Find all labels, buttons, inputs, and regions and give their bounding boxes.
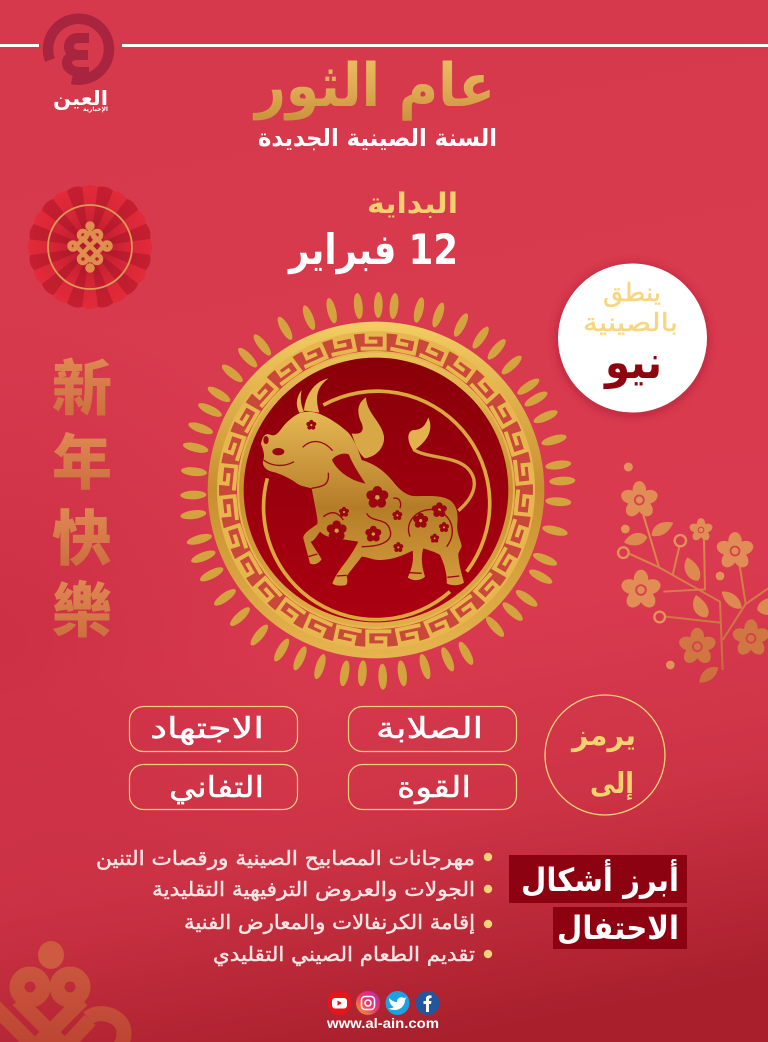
icon: instagram [356,991,380,1015]
pill: solidity [348,706,516,752]
symbolism label line 2: إلى [590,766,634,801]
ox medallion [180,292,576,690]
branch flowers [619,481,768,666]
logo tagline: الإخبارية [83,106,108,113]
calligraphy: Chinese new year: 樂 [52,563,112,650]
branch dots [621,462,724,669]
start label: البداية [367,187,458,220]
ox face details [263,437,459,577]
pronunciation circle [558,264,708,415]
symbolism label line 1: يرمز [570,718,636,752]
title: عام الثور [252,51,495,121]
ox tail [413,449,474,511]
item 4: تقديم الطعام الصيني التقليدي [213,942,475,967]
branch stems [630,515,768,670]
pill: devotion [130,764,298,810]
celebrations banner [509,855,687,949]
branch rings [618,535,686,622]
rays [180,292,576,690]
top rule right [122,44,768,47]
celebrations list [96,846,492,967]
blossom branch [618,462,768,683]
icon: youtube [328,991,352,1015]
item 3: إقامة الكرنفالات والمعارض الفنية [184,910,475,935]
calligraphy: Chinese new year [52,341,112,650]
ox far horn [352,397,384,458]
pill: strength: القوة [397,770,471,804]
icon: facebook [416,991,440,1015]
pronunciation label line 2: بالصينية [583,308,678,337]
social icons [328,991,440,1015]
pill: solidity: الصلابة [376,711,483,745]
red disc [244,358,508,622]
pill: diligence [130,706,298,752]
start date: 12 فبراير [287,225,458,275]
fan knot [70,224,110,270]
banner line 1: أبرز أشكال [521,859,679,899]
top rule left [0,44,39,47]
item 1: مهرجانات المصابيح الصينية ورقصات التنين [96,846,475,870]
item 2: الجولات والعروض الترفيهية التقليدية [152,877,475,901]
calligraphy: Chinese new year: 年 [52,415,112,502]
fan gold ring [48,205,132,289]
rosette fan [28,185,152,309]
banner line 2: الاحتفال [557,909,679,947]
pill: strength [348,764,516,810]
key pattern band [218,332,534,648]
ox flower decorations [306,420,452,552]
pill: devotion: التفاني [169,770,264,805]
calligraphy: Chinese new year: 新 [52,341,112,428]
logo mark [48,19,109,80]
ox body [261,412,464,586]
website: www.al-ain.com [326,1015,439,1031]
subtitle: السنة الصينية الجديدة [258,124,497,152]
ox near horn [297,378,328,413]
pronunciation label line 1: ينطق [603,278,661,307]
calligraphy: Chinese new year: 快 [52,491,112,578]
icon: twitter [386,991,410,1015]
symbolism circle [545,695,665,815]
branch leaves [624,522,768,683]
corner knot [0,941,124,1042]
symbolism section [130,695,665,815]
ox [261,378,474,586]
logo: Al-Ain [48,19,109,113]
inner arcs [264,391,490,620]
fan pleats [28,185,152,309]
logo wordmark: العين [53,86,108,110]
pronunciation word: نيو [603,335,662,389]
pill: diligence: الاجتهاد [150,711,264,745]
gold frame [208,322,544,658]
